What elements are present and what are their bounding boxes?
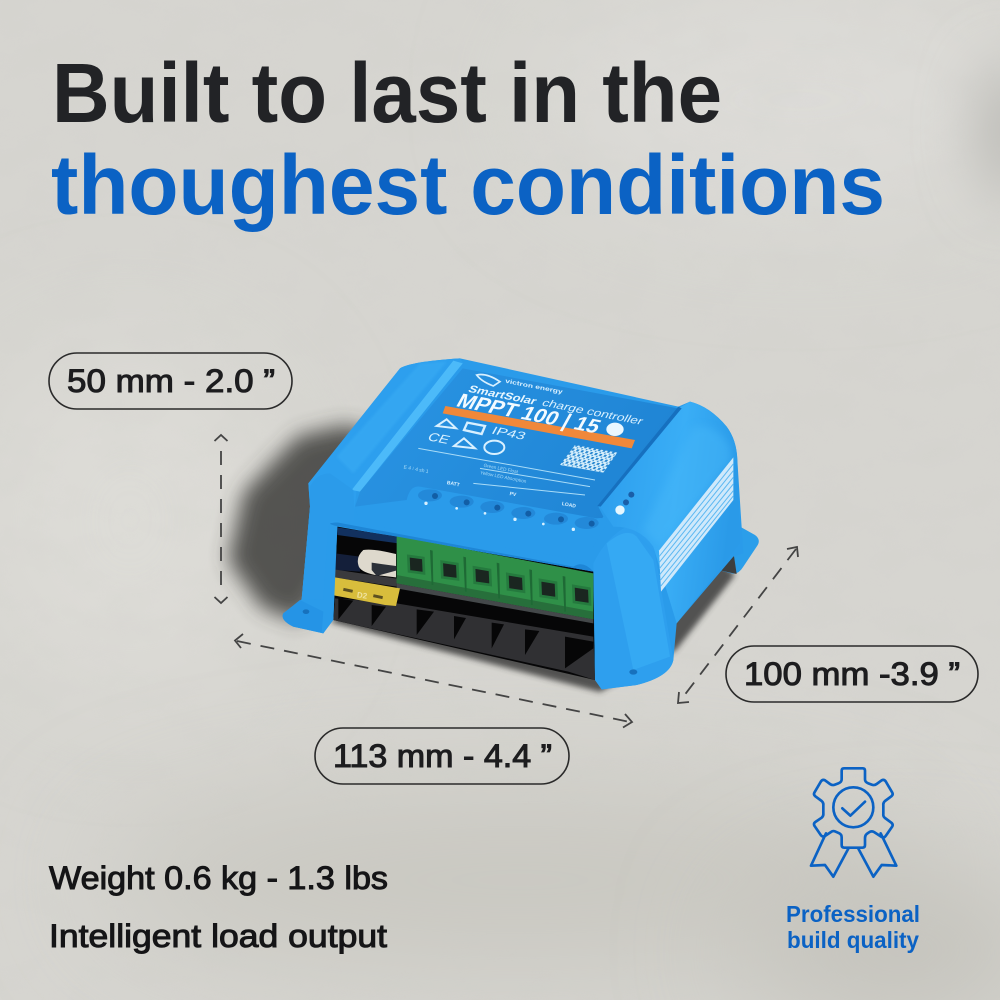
device label text: E 4 ⁝ 4 sh 1 xyxy=(403,464,429,475)
device label text: victron energy xyxy=(505,379,564,396)
device label text: PV xyxy=(509,491,517,498)
device label text: SmartSolar xyxy=(466,384,539,407)
device label text xyxy=(403,375,646,510)
weight and load text: Weight 0.6 kg - 1.3 lbs xyxy=(49,860,388,896)
product: MPPT charge controller xyxy=(283,358,759,689)
weight and load text xyxy=(49,860,388,954)
device shadow xyxy=(228,425,735,692)
side label xyxy=(659,457,733,592)
device label text: BATT xyxy=(446,480,460,488)
title: Built to last in the xyxy=(52,46,722,140)
label: depth xyxy=(726,646,978,702)
dimension arrow: height xyxy=(214,435,228,603)
title xyxy=(51,46,885,232)
caption: professional build quality: Professional xyxy=(786,901,920,927)
top panel xyxy=(355,368,682,560)
front cavity with heat sink xyxy=(333,527,595,680)
white connector xyxy=(358,550,396,577)
caption: professional build quality xyxy=(786,901,920,953)
indicator LEDs xyxy=(615,492,634,515)
label: width xyxy=(315,728,569,784)
device label text: Green LED Float xyxy=(483,463,519,474)
front lip and left foot xyxy=(283,522,593,633)
icon: quality badge xyxy=(811,768,896,877)
left end cap xyxy=(302,358,463,600)
device label text: LOAD xyxy=(561,501,577,510)
device label text: Yellow LED Absorption xyxy=(480,470,527,484)
weight and load text: Intelligent load output xyxy=(49,918,387,954)
green terminal block xyxy=(397,536,593,623)
yellow fuse: D2 xyxy=(356,590,368,601)
right rear foot xyxy=(718,527,759,574)
label: height xyxy=(49,353,292,409)
caption: professional build quality: build quality xyxy=(787,927,919,953)
device label text: IP43 xyxy=(489,425,528,442)
right side panel xyxy=(600,402,740,623)
dimension arrow: width xyxy=(235,634,632,728)
title: thoughest conditions xyxy=(51,138,885,232)
dimension arrow: depth xyxy=(678,547,798,703)
device label text: charge controller xyxy=(540,397,646,428)
device label text: MPPT 100 | 15 xyxy=(453,390,605,438)
label: depth: 100 mm -3.9 ” xyxy=(744,656,960,692)
yellow fuse xyxy=(332,577,400,606)
device label text: CE xyxy=(425,430,452,447)
orange stripe xyxy=(443,406,635,448)
screw and button row xyxy=(418,489,599,531)
main body xyxy=(283,358,743,689)
label: height: 50 mm - 2.0 ” xyxy=(67,363,275,399)
right front pillar xyxy=(593,526,673,689)
label: width: 113 mm - 4.4 ” xyxy=(333,738,552,774)
